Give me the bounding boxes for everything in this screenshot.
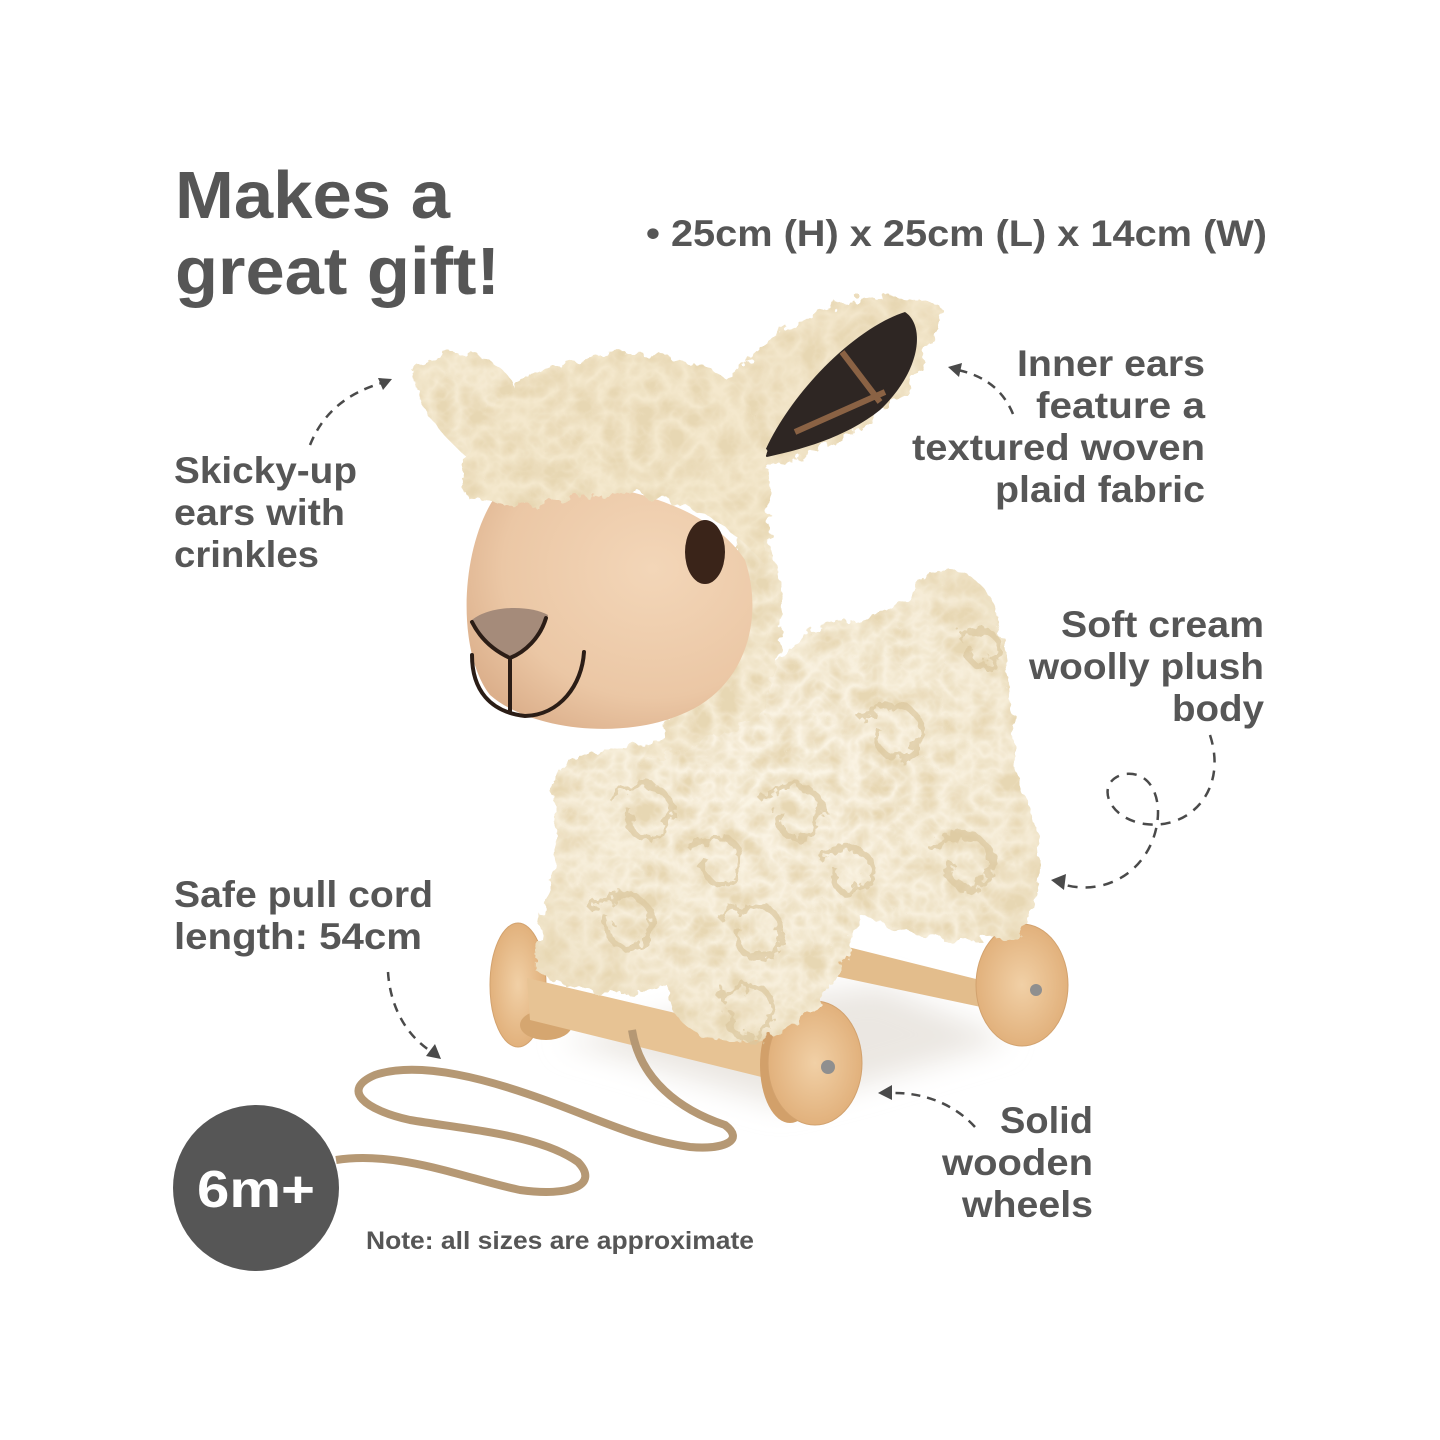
callout: ears: crinkles — [174, 534, 319, 575]
front bar — [527, 978, 790, 1082]
callout: cord — [174, 874, 433, 957]
rear right wheel — [976, 924, 1068, 1046]
right ear — [712, 297, 942, 470]
mouth — [472, 618, 584, 716]
rear left wheel — [490, 923, 572, 1047]
callout: wheels: Solid — [1000, 1100, 1093, 1141]
arrow: body loop — [1051, 735, 1215, 890]
plaid inner ear — [762, 312, 917, 458]
floor shadow — [560, 985, 1010, 1105]
age badge — [173, 1105, 339, 1271]
callout: wheels — [941, 1100, 1093, 1225]
body wool — [537, 570, 1039, 1041]
note: Note: all sizes are approximate — [366, 1227, 754, 1255]
callout: body: Soft cream — [1061, 604, 1264, 645]
muzzle — [467, 483, 752, 729]
callout: inner ears: Inner ears — [1017, 343, 1205, 384]
title: Makes a — [175, 158, 451, 233]
title — [175, 158, 500, 309]
dimensions text: • 25cm (H) x 25cm (L) x 14cm (W) — [646, 213, 1267, 254]
head neck wool — [640, 500, 780, 765]
arrow: wheels — [878, 1085, 975, 1127]
callout: cord: Safe pull cord — [174, 874, 433, 915]
pull cord — [336, 1030, 733, 1192]
eye — [685, 520, 725, 584]
callout: ears: ears with — [174, 492, 345, 533]
age badge: 6m+ — [197, 1161, 315, 1219]
arrow: cord — [388, 972, 441, 1059]
arrow: inner ears — [948, 363, 1013, 414]
callout: body: body — [1172, 688, 1264, 729]
head wool — [465, 354, 770, 565]
left ear — [412, 353, 530, 468]
callout: inner ears — [912, 343, 1205, 510]
callout: ears: Skicky-up — [174, 450, 357, 491]
callout: body: woolly plush — [1028, 646, 1264, 687]
callout: inner ears: textured woven — [912, 427, 1205, 468]
arrow: ears — [310, 378, 392, 445]
callout: ears — [174, 450, 357, 575]
callout: wheels: wheels — [961, 1184, 1093, 1225]
product: sheep pull toy — [336, 297, 1068, 1192]
front wheel — [760, 1001, 862, 1125]
nose — [472, 608, 548, 658]
rear axle — [830, 945, 1000, 1010]
callout: inner ears: feature a — [1036, 385, 1205, 426]
callout: wheels: wooden — [941, 1142, 1093, 1183]
wool curl shading — [590, 631, 999, 1038]
callout: inner ears: plaid fabric — [995, 469, 1205, 510]
callout: body — [1028, 604, 1264, 729]
title: great gift! — [175, 234, 500, 309]
callout: cord: length: 54cm — [174, 916, 422, 957]
